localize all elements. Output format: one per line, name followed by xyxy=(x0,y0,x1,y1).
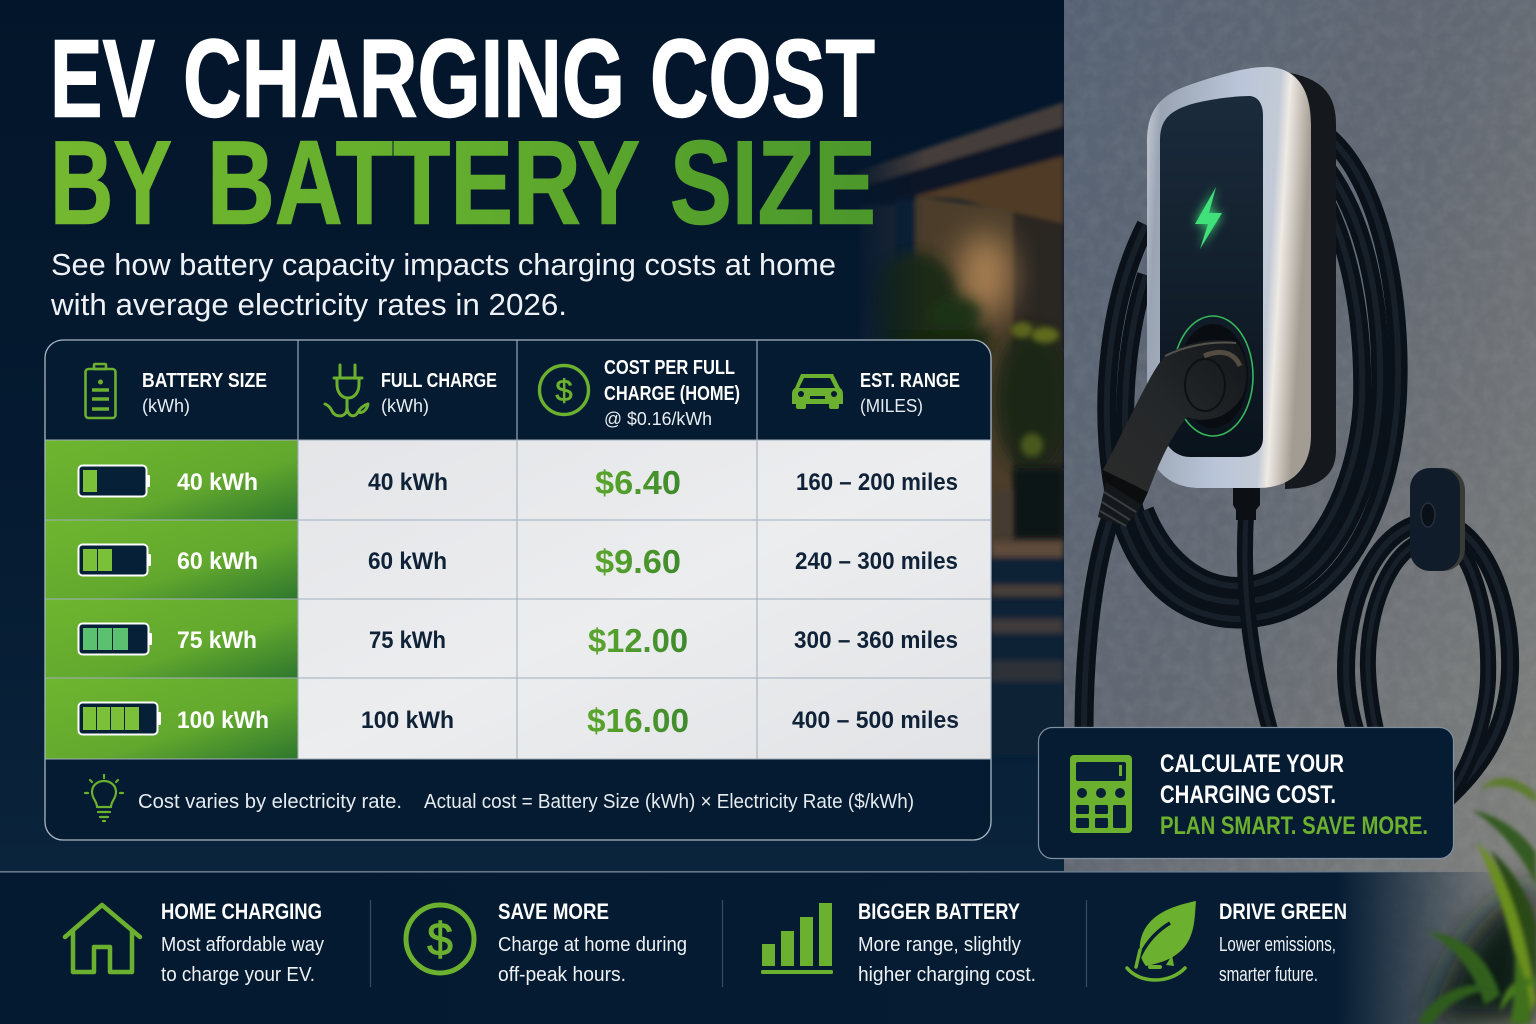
row: 100 kWh: 100 kWh xyxy=(177,707,269,734)
charging port ring xyxy=(1173,316,1253,436)
feature: save more xyxy=(406,899,687,986)
callout: calculate your charging cost: CALCULATE YOUR xyxy=(1160,750,1344,778)
icon: dollar circle xyxy=(406,905,474,973)
row: 40 kWh: 40 kWh xyxy=(368,469,448,496)
row: 40 kWh: 40 kWh xyxy=(177,469,258,496)
roof fascia xyxy=(850,102,1064,190)
row: 60 kWh: $9.60 xyxy=(595,543,681,580)
title: BY xyxy=(50,116,172,250)
row: 100 kWh xyxy=(78,702,959,739)
row: 75 kWh: 75 kWh xyxy=(177,627,257,654)
feature: home charging: to charge your EV. xyxy=(161,964,315,986)
charging connector plug xyxy=(1084,340,1247,730)
house scene backdrop xyxy=(858,101,1064,685)
title: BATTERY xyxy=(207,116,640,250)
feature: bigger battery: BIGGER BATTERY xyxy=(858,899,1020,924)
callout: calculate your charging cost: PLAN SMART. SAVE MORE. xyxy=(1160,812,1428,840)
icon: dollar coin: $ xyxy=(555,373,573,408)
icon: car xyxy=(792,374,843,409)
row: 75 kWh: 300 – 360 miles xyxy=(794,627,958,654)
icon: plug xyxy=(325,365,368,416)
icon: dollar circle: $ xyxy=(427,913,453,965)
wall xyxy=(1064,0,1536,1024)
header: estimated range: EST. RANGE xyxy=(860,370,960,392)
charger silver body xyxy=(1147,67,1311,488)
bottom band xyxy=(0,872,1536,1024)
header: estimated range: (MILES) xyxy=(860,396,923,416)
callout: calculate your charging cost xyxy=(1038,728,1454,858)
table base xyxy=(45,340,991,840)
feature: home charging: HOME CHARGING xyxy=(161,899,322,924)
row: 100 kWh: 100 kWh xyxy=(361,707,454,734)
icon: battery xyxy=(86,364,116,418)
feature: bigger battery: More range, slightly xyxy=(858,934,1021,956)
header: full charge: (kWh) xyxy=(381,396,429,416)
icon: leaf xyxy=(1127,901,1196,980)
header: cost per full charge xyxy=(540,357,740,429)
plant foliage bottom right xyxy=(1418,778,1536,1024)
feature: save more: off-peak hours. xyxy=(498,964,626,986)
row: 100 kWh: $16.00 xyxy=(587,702,689,739)
porch wall xyxy=(915,196,1013,545)
roof soffit xyxy=(882,126,1064,200)
header: battery size: (kWh) xyxy=(142,396,190,416)
header: cost per full charge: @ $0.16/kWh xyxy=(604,409,712,429)
steps xyxy=(992,538,1064,685)
row: 60 kWh: 60 kWh xyxy=(368,548,447,575)
icon: dollar coin xyxy=(540,366,588,414)
charger back plate xyxy=(1285,72,1336,489)
subtitle: See how battery capacity impacts charging costs at home xyxy=(51,247,836,282)
feature: home charging: Most affordable way xyxy=(161,934,324,956)
row: 75 kWh xyxy=(78,622,958,659)
feature: bigger battery xyxy=(761,899,1036,986)
table footer note: Actual cost = Battery Size (kWh) × Electricity Rate ($/kWh) xyxy=(424,791,914,813)
wall charger illustration xyxy=(1084,67,1510,805)
feature: home charging xyxy=(65,899,324,986)
icon: battery 100 xyxy=(78,702,161,734)
second cable hanging from charger xyxy=(1233,488,1270,730)
charging cable coil xyxy=(1107,135,1398,619)
callout: calculate your charging cost: CHARGING COST. xyxy=(1160,781,1336,809)
entry plant and pot xyxy=(994,322,1070,538)
header: cost per full charge: CHARGE (HOME) xyxy=(604,383,740,405)
charger screen xyxy=(1160,96,1263,457)
feature: bigger battery: higher charging cost. xyxy=(858,964,1036,986)
icon: battery 60 xyxy=(78,544,151,576)
header: battery size xyxy=(86,364,267,418)
feature: drive green: DRIVE GREEN xyxy=(1219,899,1347,924)
feature: drive green: smarter future. xyxy=(1219,964,1318,986)
subtitle xyxy=(50,247,836,322)
wall hook coil xyxy=(1346,468,1510,805)
title xyxy=(50,18,876,250)
feature: drive green xyxy=(1127,899,1347,986)
icon: calculator xyxy=(1070,755,1132,833)
icon: glowing lightning bolt xyxy=(1195,187,1222,249)
icon: battery 75 xyxy=(78,624,152,654)
header: full charge: FULL CHARGE xyxy=(381,370,497,392)
row: 100 kWh: 400 – 500 miles xyxy=(792,707,959,734)
title: COST xyxy=(650,18,875,140)
row: 40 kWh: 160 – 200 miles xyxy=(796,469,958,496)
icon: bar chart xyxy=(761,903,833,974)
title: SIZE xyxy=(670,116,876,250)
row: 40 kWh: $6.40 xyxy=(595,464,681,501)
feature: save more: Charge at home during xyxy=(498,934,687,956)
row: 75 kWh: 75 kWh xyxy=(369,627,446,654)
table footer note xyxy=(85,775,914,821)
feature: drive green: Lower emissions, xyxy=(1219,934,1336,956)
icon: house xyxy=(65,905,140,972)
icon: battery 40 xyxy=(78,466,150,496)
porch ceiling xyxy=(915,156,1064,224)
header: estimated range xyxy=(792,370,960,416)
panel: cost table xyxy=(45,340,991,840)
header: battery size: BATTERY SIZE xyxy=(142,370,267,392)
title: EV xyxy=(50,18,155,140)
row: 60 kWh: 60 kWh xyxy=(177,548,258,575)
table rows fill xyxy=(45,440,991,759)
header: full charge xyxy=(325,365,497,416)
row: 75 kWh: $12.00 xyxy=(588,622,688,659)
title: CHARGING xyxy=(183,18,625,140)
icon: light bulb xyxy=(85,775,123,821)
row: 60 kWh: 240 – 300 miles xyxy=(795,548,958,575)
row: 60 kWh xyxy=(78,543,958,580)
porch plant xyxy=(873,252,990,350)
subtitle: with average electricity rates in 2026. xyxy=(50,287,567,322)
row: 40 kWh xyxy=(78,464,958,501)
feature: save more: SAVE MORE xyxy=(498,899,609,924)
table footer note: Cost varies by electricity rate. xyxy=(138,791,402,813)
header: cost per full charge: COST PER FULL xyxy=(604,357,735,379)
